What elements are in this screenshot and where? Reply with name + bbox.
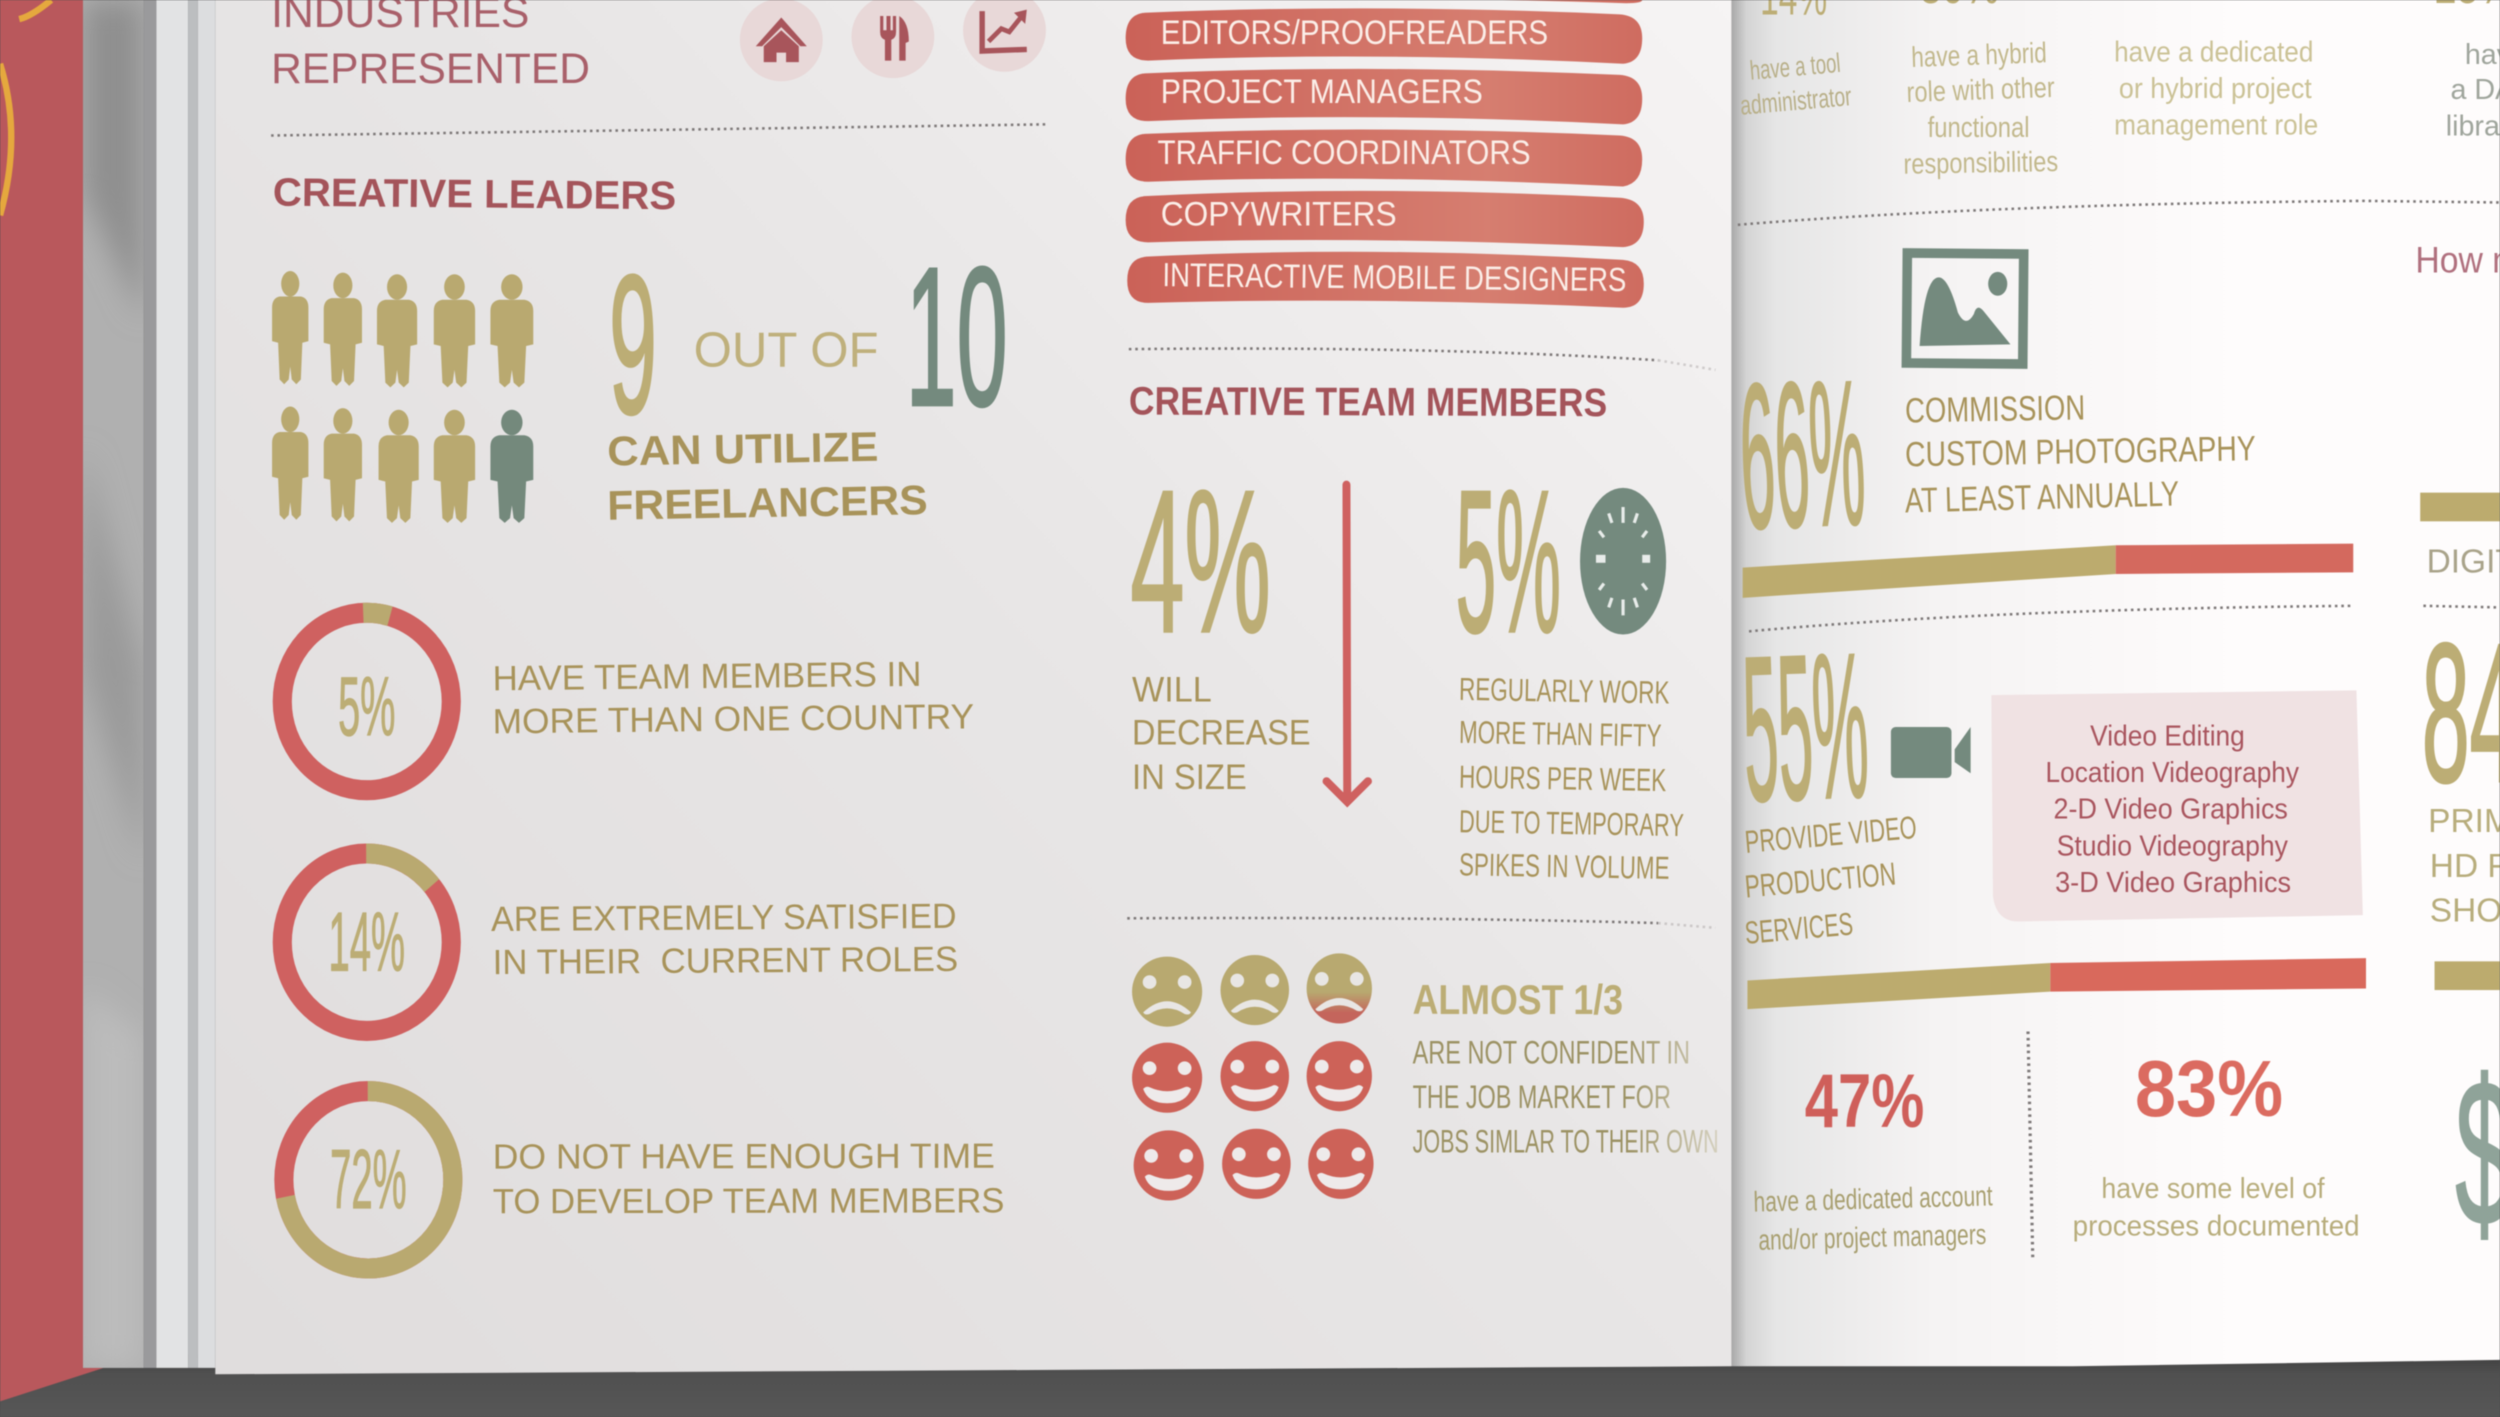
text: hybrid role: functional <box>1928 112 2030 144</box>
panel: tools and roles stats <box>1739 0 2500 181</box>
left page <box>215 0 1731 1374</box>
panel: role pills <box>1126 0 1644 308</box>
page block edge <box>83 0 215 1368</box>
panel: video production: 55% <box>1739 610 1872 844</box>
pill: copywriters <box>1126 191 1644 247</box>
panel: creative team members: 5% <box>1456 448 1561 674</box>
callout: video services list: Studio Videography <box>2057 830 2288 862</box>
arrow: down <box>1327 485 1368 802</box>
pill: interactive mobile designers: INTERACTIVE MOBILE DESIGNERS <box>1162 257 1627 299</box>
text: commission custom photography: AT LEAST ANNUALLY <box>1904 474 2180 521</box>
panel: clipped right column <box>2415 240 2500 1268</box>
stat: 47 percent account managers: 47% <box>1805 1059 1924 1144</box>
pill: editors <box>1126 8 1642 64</box>
stat: 83 percent processes documented: 83% <box>2135 1044 2283 1133</box>
text: will decrease in size: IN SIZE <box>1132 758 1247 797</box>
stat: 47 percent account managers <box>1753 1059 1993 1257</box>
pictogram: three sad and six happy faces <box>1132 953 1374 1200</box>
text: regularly work more than fifty hours: SPIKES IN VOLUME <box>1459 846 1670 886</box>
stat: 47 percent account managers: have a dedicated account <box>1753 1180 1993 1219</box>
bar: digital <box>2420 493 2500 521</box>
text: provide video production services <box>1743 809 1918 951</box>
callout: video services list: Video Editing <box>2090 720 2245 752</box>
heading: creative team members: CREATIVE TEAM MEMBERS <box>1129 380 1607 425</box>
stat: 47 percent account managers: and/or project managers <box>1758 1219 1987 1257</box>
text: commission custom photography: CUSTOM PHOTOGRAPHY <box>1905 429 2256 474</box>
panel: job market confidence <box>1132 953 1719 1200</box>
pill: traffic coordinators: TRAFFIC COORDINATORS <box>1158 134 1531 172</box>
text: team members in more than one country <box>492 655 974 741</box>
callout: video services list <box>1991 690 2363 921</box>
text: will decrease in size <box>1132 670 1311 797</box>
stat: 83 percent processes documented: have some level of <box>2101 1173 2325 1205</box>
panel: custom photography: 66% <box>1736 337 1868 572</box>
text: not confident in job market: JOBS SIMLAR TO THEIR OWN <box>1413 1123 1719 1160</box>
text: extremely satisfied in current roles: ARE EXTREMELY SATISFIED <box>491 897 957 939</box>
icon: clock <box>1580 488 1666 635</box>
text: regularly work more than fifty hours: DUE TO TEMPORARY <box>1459 803 1684 843</box>
text: tool administrator <box>1739 47 1853 121</box>
text: not confident in job market: THE JOB MARKET FOR <box>1413 1078 1671 1115</box>
icon: video camera <box>1891 727 1971 778</box>
pictogram: ten people, nine tan and one green <box>272 271 533 523</box>
text: team members in more than one country: HAVE TEAM MEMBERS IN <box>492 655 922 698</box>
heading: creative leaders: CREATIVE LEADERS <box>273 171 676 218</box>
pill: traffic coordinators <box>1126 130 1642 187</box>
text: 10 <box>906 226 1008 447</box>
floor background <box>0 1355 2500 1417</box>
panel: creative leaders <box>272 171 1008 529</box>
partial stat row <box>1760 0 2500 26</box>
text: extremely satisfied in current roles <box>491 897 958 982</box>
text: regularly work more than fifty hours: HOURS PER WEEK <box>1459 759 1667 798</box>
text: extremely satisfied in current roles: IN THEIR CURRENT ROLES <box>492 940 958 982</box>
bar: 84 percent <box>2435 961 2500 990</box>
text: team members in more than one country: MORE THAN ONE COUNTRY <box>492 697 974 741</box>
text: hybrid role: role with other <box>1906 72 2056 109</box>
text: hybrid role <box>1903 37 2058 181</box>
donut chart: 14 percent: 14% <box>329 896 405 989</box>
stat: 83 percent processes documented: processes documented <box>2073 1211 2360 1243</box>
pill: project managers: PROJECT MANAGERS <box>1161 73 1483 111</box>
pill: editors: EDITORS/PROOFREADERS <box>1161 14 1548 52</box>
donut chart: 5 percent <box>279 610 454 793</box>
panel: video production <box>1739 610 2366 1009</box>
text: hybrid role: responsibilities <box>1903 146 2058 181</box>
pill top remnant <box>1276 0 1642 3</box>
text: not enough time to develop team members: TO DEVELOP TEAM MEMBERS <box>493 1181 1004 1221</box>
donut chart: 72 percent: 72% <box>330 1133 407 1227</box>
bar chart: 55 percent <box>1747 958 2366 1009</box>
text: tool administrator: have a tool <box>1748 47 1842 86</box>
text: tool administrator: administrator <box>1739 80 1853 121</box>
heading: industries represented: REPRESENTED <box>271 45 590 93</box>
right page <box>1731 0 2500 1366</box>
text: regularly work more than fifty hours <box>1459 671 1684 886</box>
red book cover <box>0 0 104 1401</box>
text: provide video production services: PRODUCTION <box>1743 855 1897 905</box>
pill: project managers <box>1126 69 1642 124</box>
text: not confident in job market <box>1413 1033 1719 1160</box>
text: dedicated project management <box>2114 36 2318 142</box>
text: not enough time to develop team members: DO NOT HAVE ENOUGH TIME <box>493 1137 995 1177</box>
panel: industries represented <box>271 0 1046 93</box>
panel: custom photography <box>1736 253 2353 598</box>
text: dedicated project management: or hybrid project <box>2119 73 2312 105</box>
text: hybrid role: have a hybrid <box>1911 37 2047 74</box>
text: regularly work more than fifty hours: MORE THAN FIFTY <box>1459 714 1662 753</box>
icon: house <box>740 0 823 81</box>
text: not enough time to develop team members <box>493 1137 1004 1221</box>
text: digital asset library, clipped <box>2446 39 2500 143</box>
donut chart: 72 percent <box>284 1091 453 1268</box>
panel: creative team members <box>1129 380 1684 886</box>
caption: can utilize freelancers <box>607 423 928 529</box>
icon: photo <box>1906 253 2024 364</box>
stat: 9 out of 10 <box>609 226 1008 455</box>
heading: industries represented <box>271 0 590 93</box>
text: dedicated project management: have a dedicated <box>2114 36 2313 68</box>
stat: 83 percent processes documented <box>2073 1044 2360 1243</box>
text: regularly work more than fifty hours: REGULARLY WORK <box>1459 671 1670 711</box>
donut chart: 14 percent <box>282 854 451 1031</box>
bar chart: 66 percent <box>1743 544 2353 598</box>
callout: video services list: 3-D Video Graphics <box>2055 867 2291 899</box>
icon: growth chart <box>963 0 1046 72</box>
text: commission custom photography: COMMISSION <box>1905 388 2086 430</box>
text: will decrease in size: WILL <box>1132 670 1212 709</box>
stat: 9 out of 10: OUT OF <box>694 323 879 378</box>
text: dedicated project management: management role <box>2114 110 2318 142</box>
text: not confident in job market: ARE NOT CONFIDENT IN <box>1413 1033 1690 1070</box>
callout: video services list: 2-D Video Graphics <box>2054 794 2288 826</box>
caption: can utilize freelancers: FREELANCERS <box>607 476 928 529</box>
text: provide video production services: SERVICES <box>1743 905 1854 951</box>
stat: almost one third: ALMOST 1/3 <box>1413 976 1623 1023</box>
pill: interactive mobile designers <box>1127 252 1644 308</box>
text: commission custom photography <box>1904 388 2256 521</box>
panel: creative team members: 4% <box>1130 448 1271 674</box>
text: provide video production services: PROVIDE VIDEO <box>1743 809 1918 860</box>
donut chart: 5 percent: 5% <box>338 660 395 753</box>
stat: 9 out of 10: 9 <box>609 234 657 455</box>
pill: copywriters: COPYWRITERS <box>1161 196 1397 234</box>
caption: can utilize freelancers: CAN UTILIZE <box>607 423 879 475</box>
text: will decrease in size: DECREASE <box>1132 714 1311 753</box>
callout: video services list: Location Videography <box>2046 757 2300 789</box>
icon: fork and knife <box>851 0 934 78</box>
text: primary hd shoots <box>2428 803 2500 929</box>
